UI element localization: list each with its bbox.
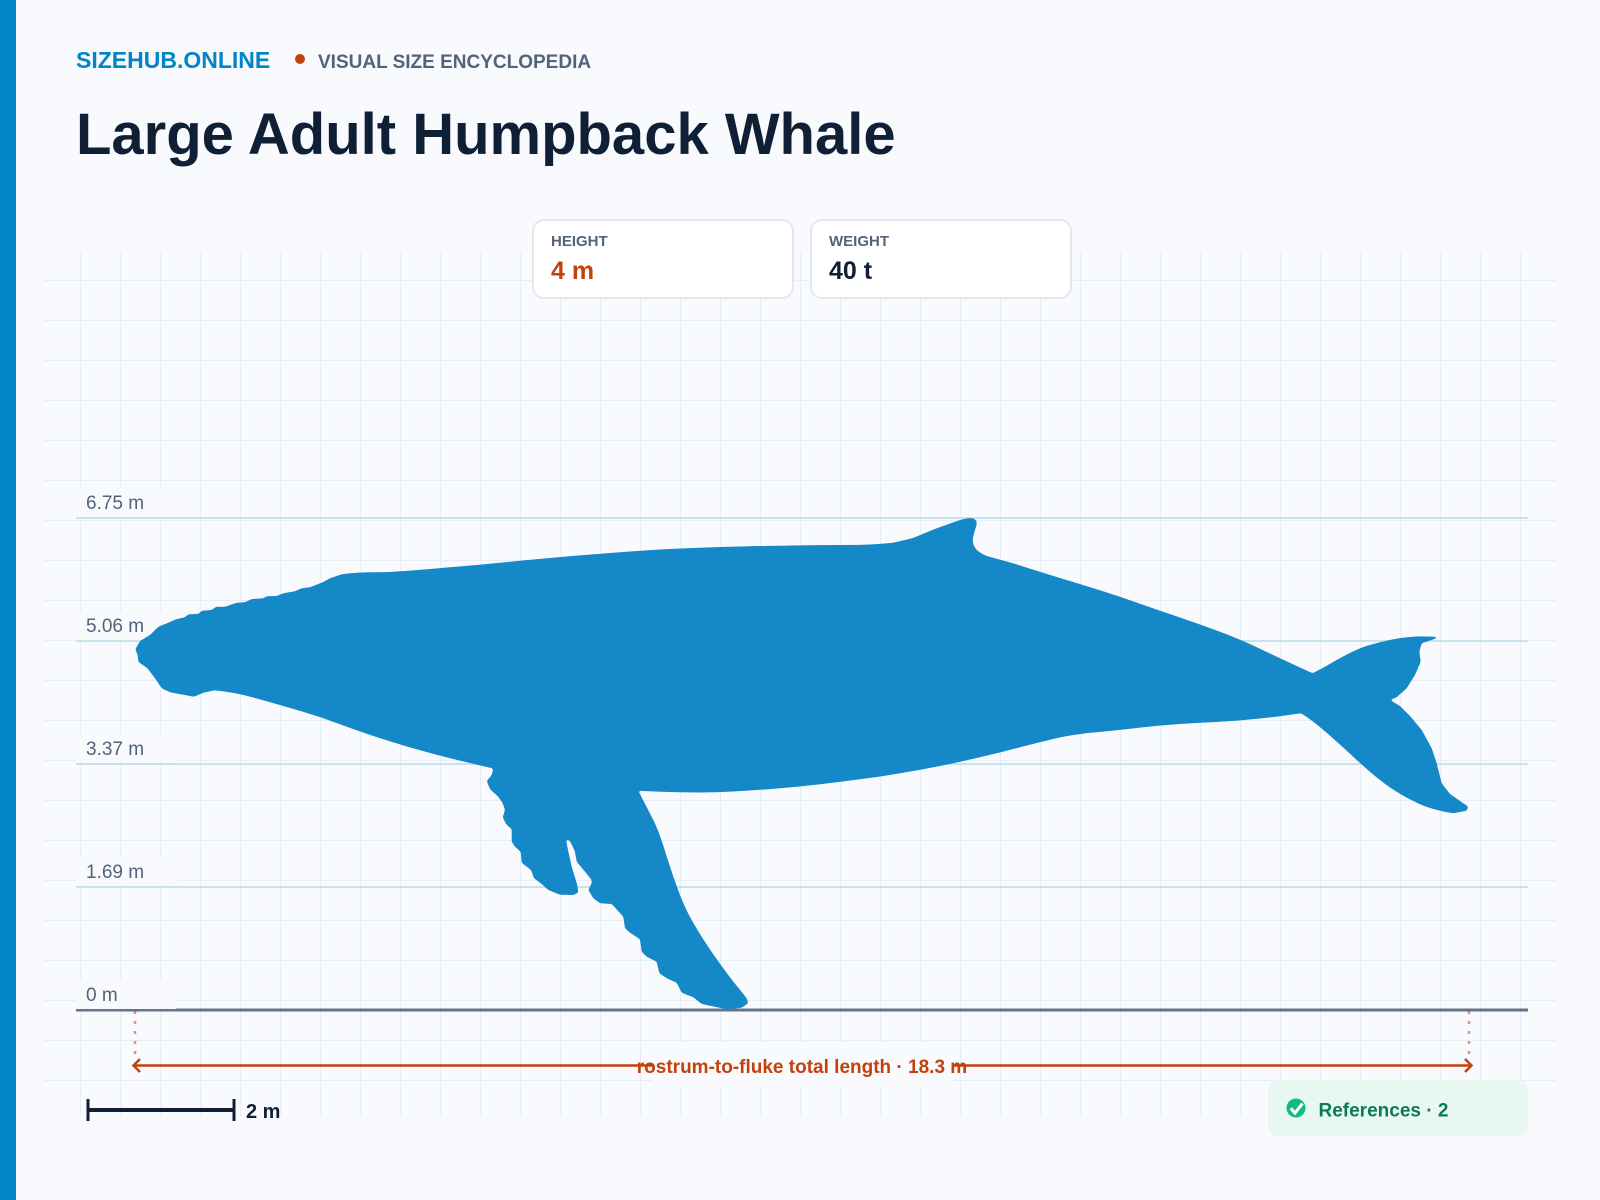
- total length label: [637, 1043, 967, 1087]
- background grid: [44, 252, 1556, 1116]
- brand header: VISUAL SIZE ENCYCLOPEDIA: [318, 52, 591, 73]
- height axis labels: [76, 488, 178, 1009]
- left accent bar: [0, 0, 16, 1200]
- height axis labels: 0 m: [86, 985, 118, 1006]
- brand header: SIZEHUB.ONLINE: [76, 47, 270, 73]
- stat card: weight: WEIGHT: [829, 233, 889, 250]
- scale bar: [88, 1099, 280, 1123]
- height axis labels: 6.75 m: [86, 493, 144, 514]
- references badge: [1268, 1080, 1528, 1136]
- humpback whale silhouette: [135, 518, 1468, 1009]
- stat card: height: [533, 220, 793, 298]
- references badge: References · 2: [1318, 1100, 1448, 1122]
- stat card: height: HEIGHT: [551, 233, 608, 250]
- total length arrow: [134, 1011, 1472, 1072]
- stat card: weight: 40 t: [829, 257, 873, 285]
- height axis labels: 3.37 m: [86, 739, 144, 760]
- title: Large Adult Humpback Whale: [76, 102, 896, 167]
- total length label: rostrum-to-fluke total length · 18.3 m: [637, 1057, 967, 1078]
- stat card: height: 4 m: [551, 257, 594, 285]
- height reference lines: [76, 517, 1528, 1012]
- brand header: [76, 47, 591, 73]
- height axis labels: 5.06 m: [86, 616, 144, 637]
- icon: check circle: [1286, 1098, 1306, 1118]
- scale bar: 2 m: [246, 1101, 280, 1123]
- stat card: weight: [811, 220, 1071, 298]
- height axis labels: 1.69 m: [86, 862, 144, 883]
